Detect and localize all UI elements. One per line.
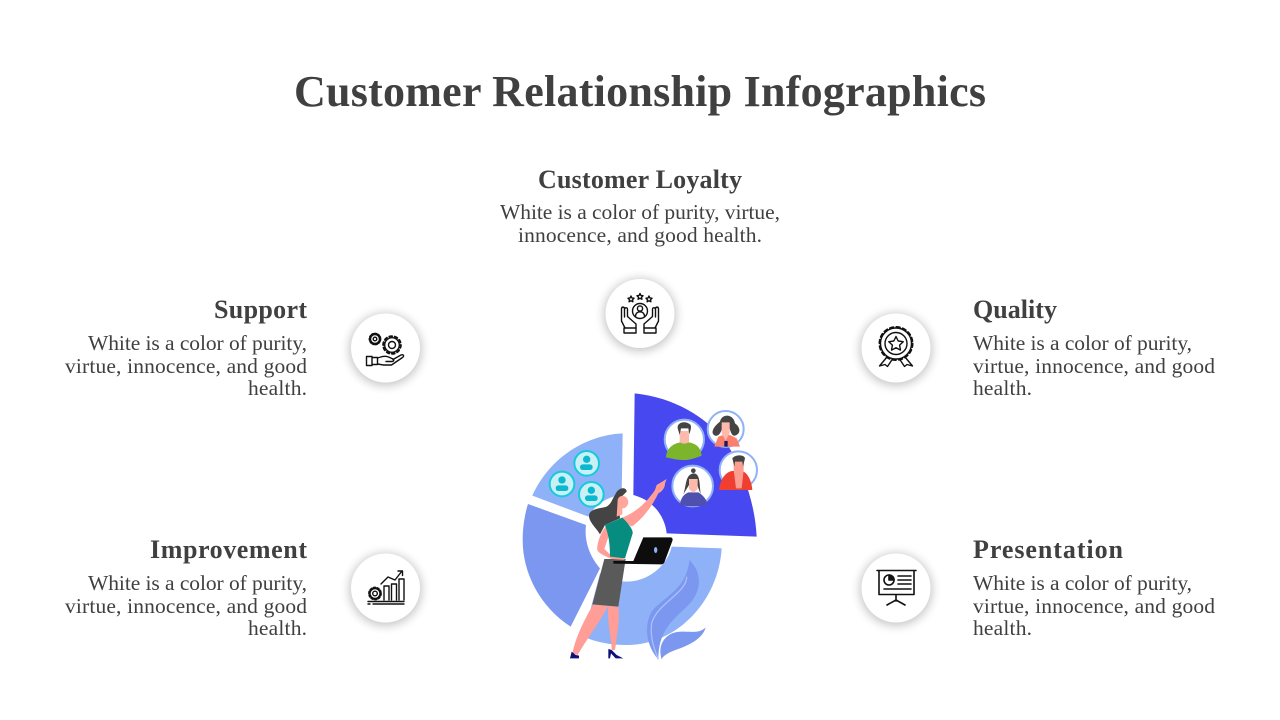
- text block: presentation: [973, 535, 1215, 640]
- text block: customer loyalty: White is a color of purity, virtue,: [500, 200, 780, 224]
- icon: presentation board: [860, 554, 932, 626]
- text block: support: health.: [248, 376, 307, 400]
- icon: quality rosette: [860, 314, 932, 386]
- text block: support: virtue, innocence, and good: [65, 354, 307, 378]
- illustration: pie chart and woman with laptop: [523, 393, 757, 659]
- text block: quality: health.: [973, 376, 1032, 400]
- text block: presentation: health.: [973, 616, 1032, 640]
- text block: improvement: [65, 535, 307, 640]
- icon: customer loyalty badge: [604, 279, 676, 351]
- text block: presentation: Presentation: [973, 535, 1124, 564]
- text block: quality: [973, 295, 1215, 400]
- text block: presentation: virtue, innocence, and good: [973, 594, 1215, 618]
- text block: support: Support: [214, 295, 307, 324]
- text block: improvement: virtue, innocence, and good: [65, 594, 307, 618]
- text block: improvement: White is a color of purity,: [88, 571, 307, 595]
- text block: quality: Quality: [973, 295, 1057, 324]
- icon: improvement chart: [350, 554, 422, 626]
- text block: quality: virtue, innocence, and good: [973, 354, 1215, 378]
- avatars: [665, 411, 757, 506]
- pie chart: [523, 393, 757, 659]
- text block: quality: White is a color of purity,: [973, 331, 1192, 355]
- text block: support: [65, 295, 307, 400]
- text block: customer loyalty: innocence, and good health.: [518, 223, 762, 247]
- text block: customer loyalty: [500, 165, 780, 247]
- text block: improvement: health.: [248, 616, 307, 640]
- woman with laptop: [570, 479, 673, 658]
- text block: support: White is a color of purity,: [88, 331, 307, 355]
- text block: customer loyalty: Customer Loyalty: [538, 165, 742, 194]
- text block: improvement: Improvement: [150, 535, 307, 564]
- text block: presentation: White is a color of purity,: [973, 571, 1192, 595]
- icon: support hand and gears: [350, 314, 422, 386]
- title: Customer Relationship Infographics: [294, 67, 986, 116]
